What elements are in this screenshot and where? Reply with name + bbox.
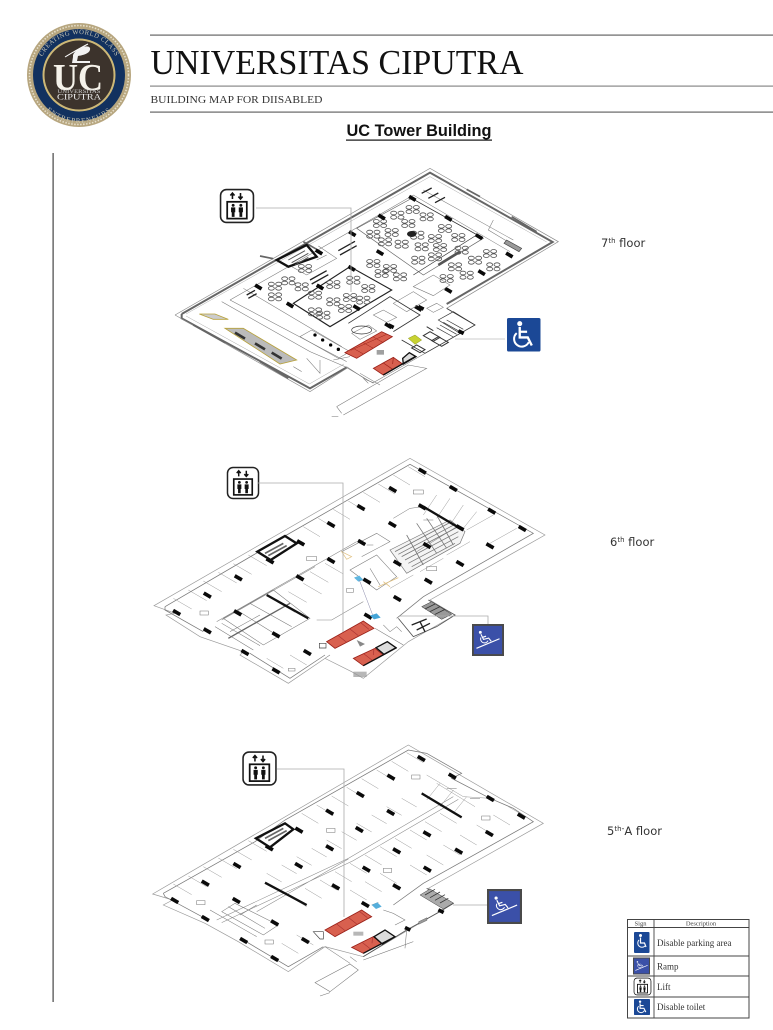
legend header: Description [686, 920, 717, 928]
central drive aisle [217, 797, 458, 923]
logo: Universitas Ciputra seal: CIPUTRA [57, 92, 101, 102]
computer lab seating [390, 515, 465, 573]
ramp markers [354, 576, 381, 619]
label: 7th floor: floor [616, 236, 645, 250]
stair core [257, 536, 297, 560]
label: 5th-A floor: - [622, 824, 625, 833]
label: 5th-A floor: th [614, 825, 622, 833]
legend row: disable parking area: Disable parking area [657, 938, 731, 948]
parking stalls [173, 467, 517, 668]
logo: Universitas Ciputra seal: UC [53, 57, 103, 99]
columns [175, 470, 524, 672]
heading: UC Tower Building: UC Tower Building [346, 121, 492, 140]
logo: Universitas Ciputra seal: ENTREPRENEURS [46, 107, 110, 123]
leader line: ramp, 5th-A floor [453, 904, 487, 906]
room: lower seating hall [293, 267, 392, 327]
legend table [628, 920, 749, 1018]
garage blocks [215, 590, 310, 650]
service core [319, 600, 455, 677]
icon: lift, 7th floor [221, 190, 253, 222]
legend header: Sign [635, 920, 647, 928]
legend row: lift: Lift [657, 982, 671, 992]
logo: Universitas Ciputra seal: UNIVERSITAS [58, 90, 101, 95]
side seating [247, 188, 500, 301]
label: 5th-A floor: 5 [607, 824, 614, 838]
legend row: ramp: Ramp [657, 962, 679, 972]
driveway [315, 930, 413, 996]
floor plan: 7th floor [175, 168, 558, 417]
legend row: disable toilet: Disable toilet [657, 1002, 706, 1012]
label: 6th floor: floor [625, 535, 654, 549]
floor plan: 6th floor [154, 458, 545, 683]
columns and thick walls [257, 197, 511, 327]
driveway [332, 365, 427, 417]
label: 6th floor: th [617, 536, 625, 544]
room: large seating hall [357, 198, 483, 275]
logo: Universitas Ciputra seal [27, 23, 131, 127]
subtitle: BUILDING MAP FOR DIISABLED [150, 94, 323, 106]
logo: Universitas Ciputra seal: CREATING WORLD CLASS [39, 30, 119, 56]
icon: ramp, 5th-A floor [487, 889, 522, 924]
label: 7th floor: 7 [601, 236, 608, 250]
floor plan: 5th-A floor [153, 745, 543, 996]
icon: lift, 6th floor [227, 467, 259, 499]
parking stalls [173, 753, 523, 953]
title: UNIVERSITAS CIPUTRA [150, 43, 524, 82]
label: 7th floor: th [608, 237, 616, 245]
stair core [256, 823, 293, 847]
left vertical rule [52, 153, 54, 1002]
leader line: ramp, 6th floor [400, 616, 488, 624]
icon: disabled toilet, 7th floor [507, 318, 540, 352]
service core [313, 888, 453, 963]
planters [199, 314, 297, 364]
label: 5th-A floor: A floor [624, 824, 662, 838]
icon: ramp, 6th floor [472, 624, 504, 656]
core area [345, 297, 475, 385]
icon: lift, 5th-A floor [243, 752, 276, 785]
leader line: lift, 6th floor [258, 483, 343, 632]
columns [173, 757, 523, 960]
header rules [150, 34, 773, 113]
label: 6th floor: 6 [610, 535, 617, 549]
leader line: lift, 5th-A floor [277, 769, 344, 917]
leader line: disabled toilet [455, 338, 505, 340]
legend header [635, 920, 717, 928]
leader line: lift, 7th floor [256, 208, 351, 292]
